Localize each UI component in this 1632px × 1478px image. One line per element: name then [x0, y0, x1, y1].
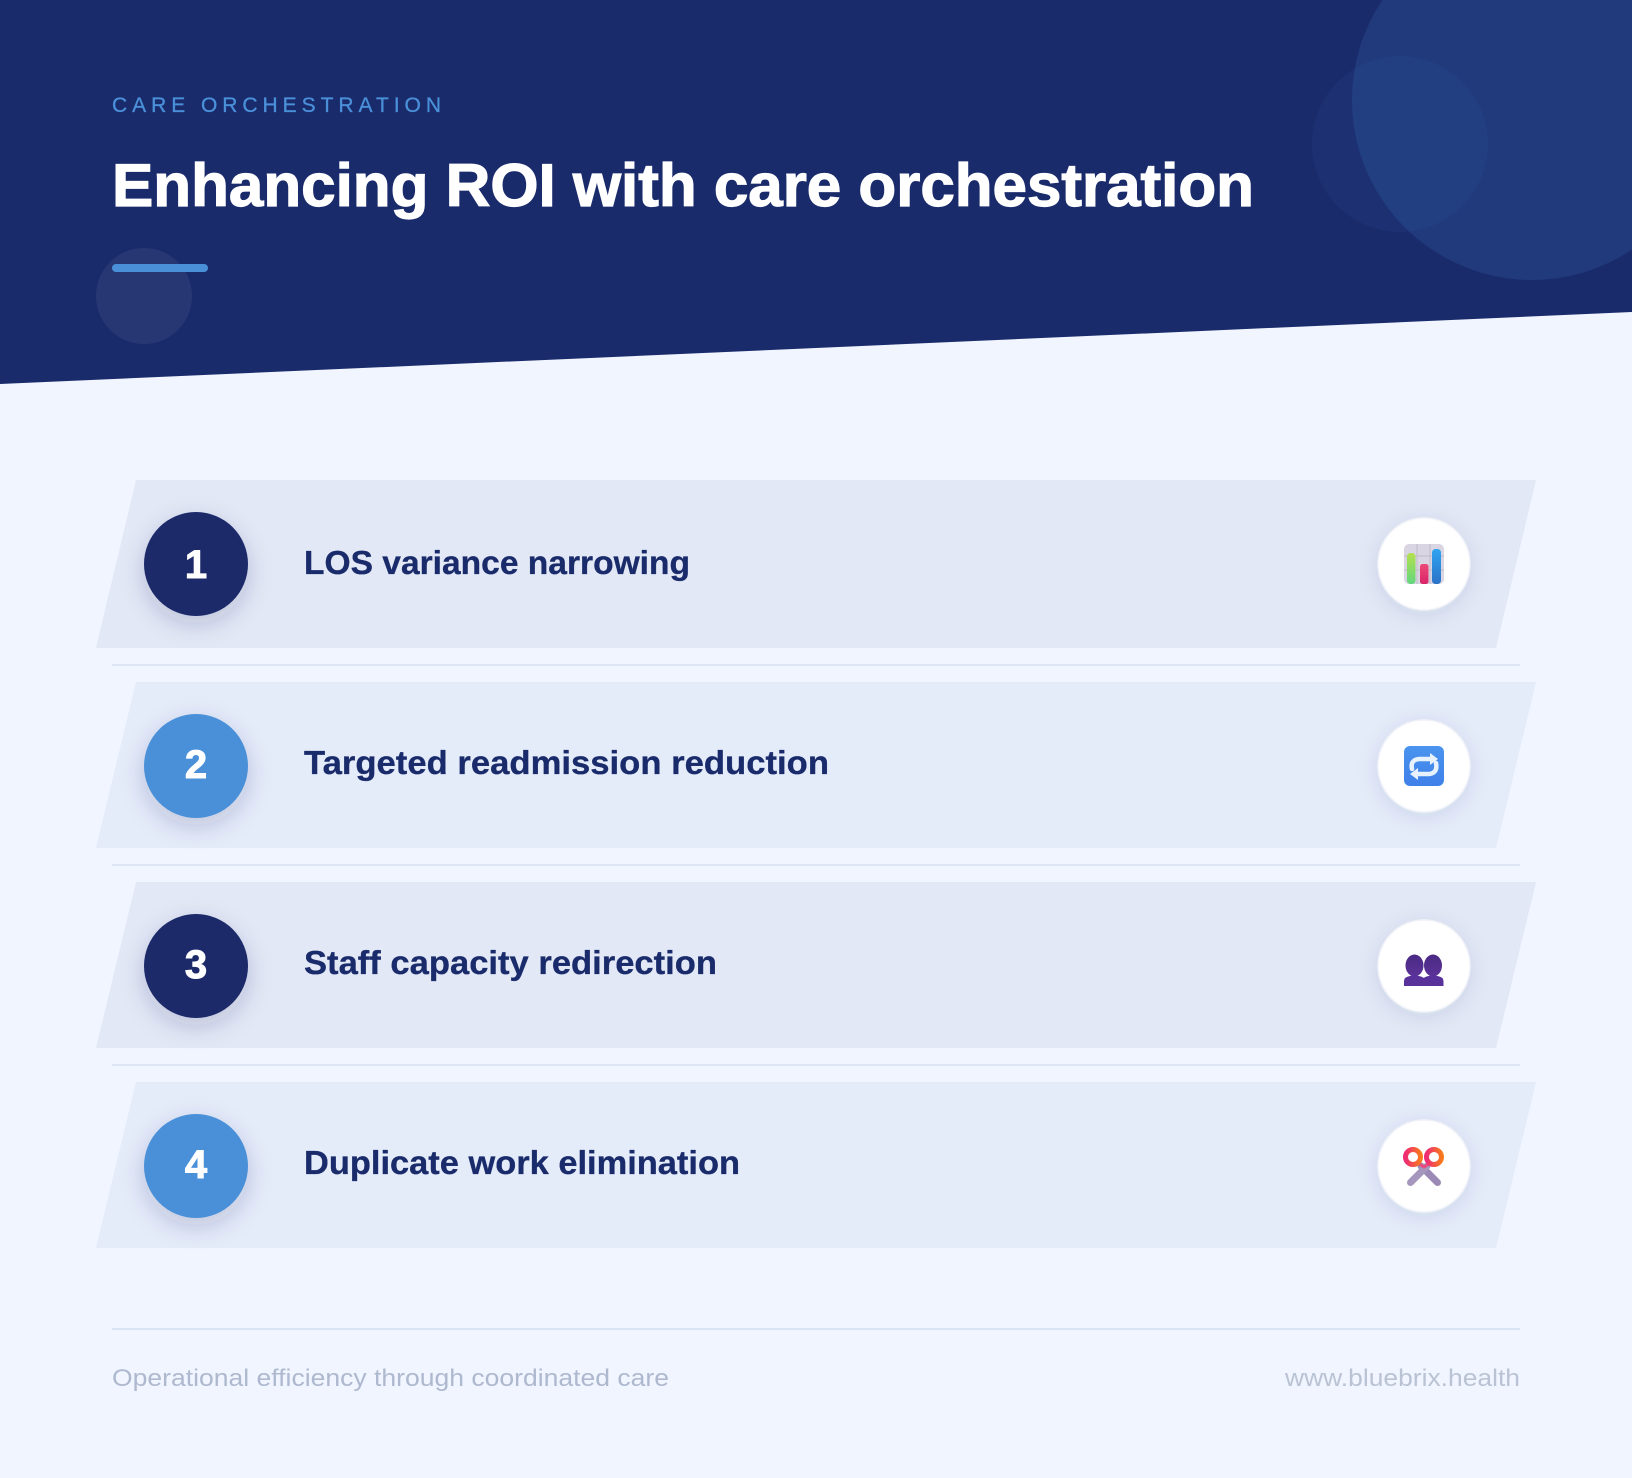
decorative large circle: [1352, 0, 1632, 280]
decorative small circle: [96, 248, 192, 344]
number badge 4: [144, 1114, 248, 1218]
title: Enhancing ROI with care orchestration: [112, 152, 1254, 219]
icon: scissors: [1378, 1120, 1470, 1212]
eyebrow label: CARE ORCHESTRATION: [112, 94, 441, 117]
item 1 label: LOS variance narrowing: [304, 544, 690, 581]
footer tagline: Operational efficiency through coordinated care: [112, 1365, 669, 1392]
number badge 1: [144, 512, 248, 616]
footer website: www.bluebrix.health: [1284, 1365, 1520, 1392]
panel: item 1: [96, 480, 1536, 648]
footer: [112, 1328, 1520, 1392]
item 3 label: Staff capacity redirection: [304, 944, 717, 981]
item 4 label: Duplicate work elimination: [304, 1144, 740, 1181]
number badge 1: 1: [185, 543, 207, 587]
number badge 3: 3: [185, 943, 207, 987]
icon: two people: [0, 0, 1470, 1012]
number badge 4: 4: [185, 1143, 208, 1187]
accent bar: [112, 264, 208, 272]
divider 2: [112, 864, 1520, 866]
icon: bar chart: [1378, 518, 1470, 610]
panel: item 2: [96, 682, 1536, 848]
header banner: [0, 0, 1632, 384]
decorative medium circle: [1312, 56, 1488, 232]
number badge 3: [144, 914, 248, 1018]
item 2 label: Targeted readmission reduction: [304, 744, 829, 781]
number badge 2: 2: [185, 743, 207, 787]
panel: item 3: [0, 0, 1536, 1048]
panel: item 4: [96, 1082, 1536, 1248]
number badge 2: [144, 714, 248, 818]
divider 1: [112, 664, 1520, 666]
divider 3: [112, 1064, 1520, 1066]
icon: repeat arrows: [1378, 720, 1470, 812]
